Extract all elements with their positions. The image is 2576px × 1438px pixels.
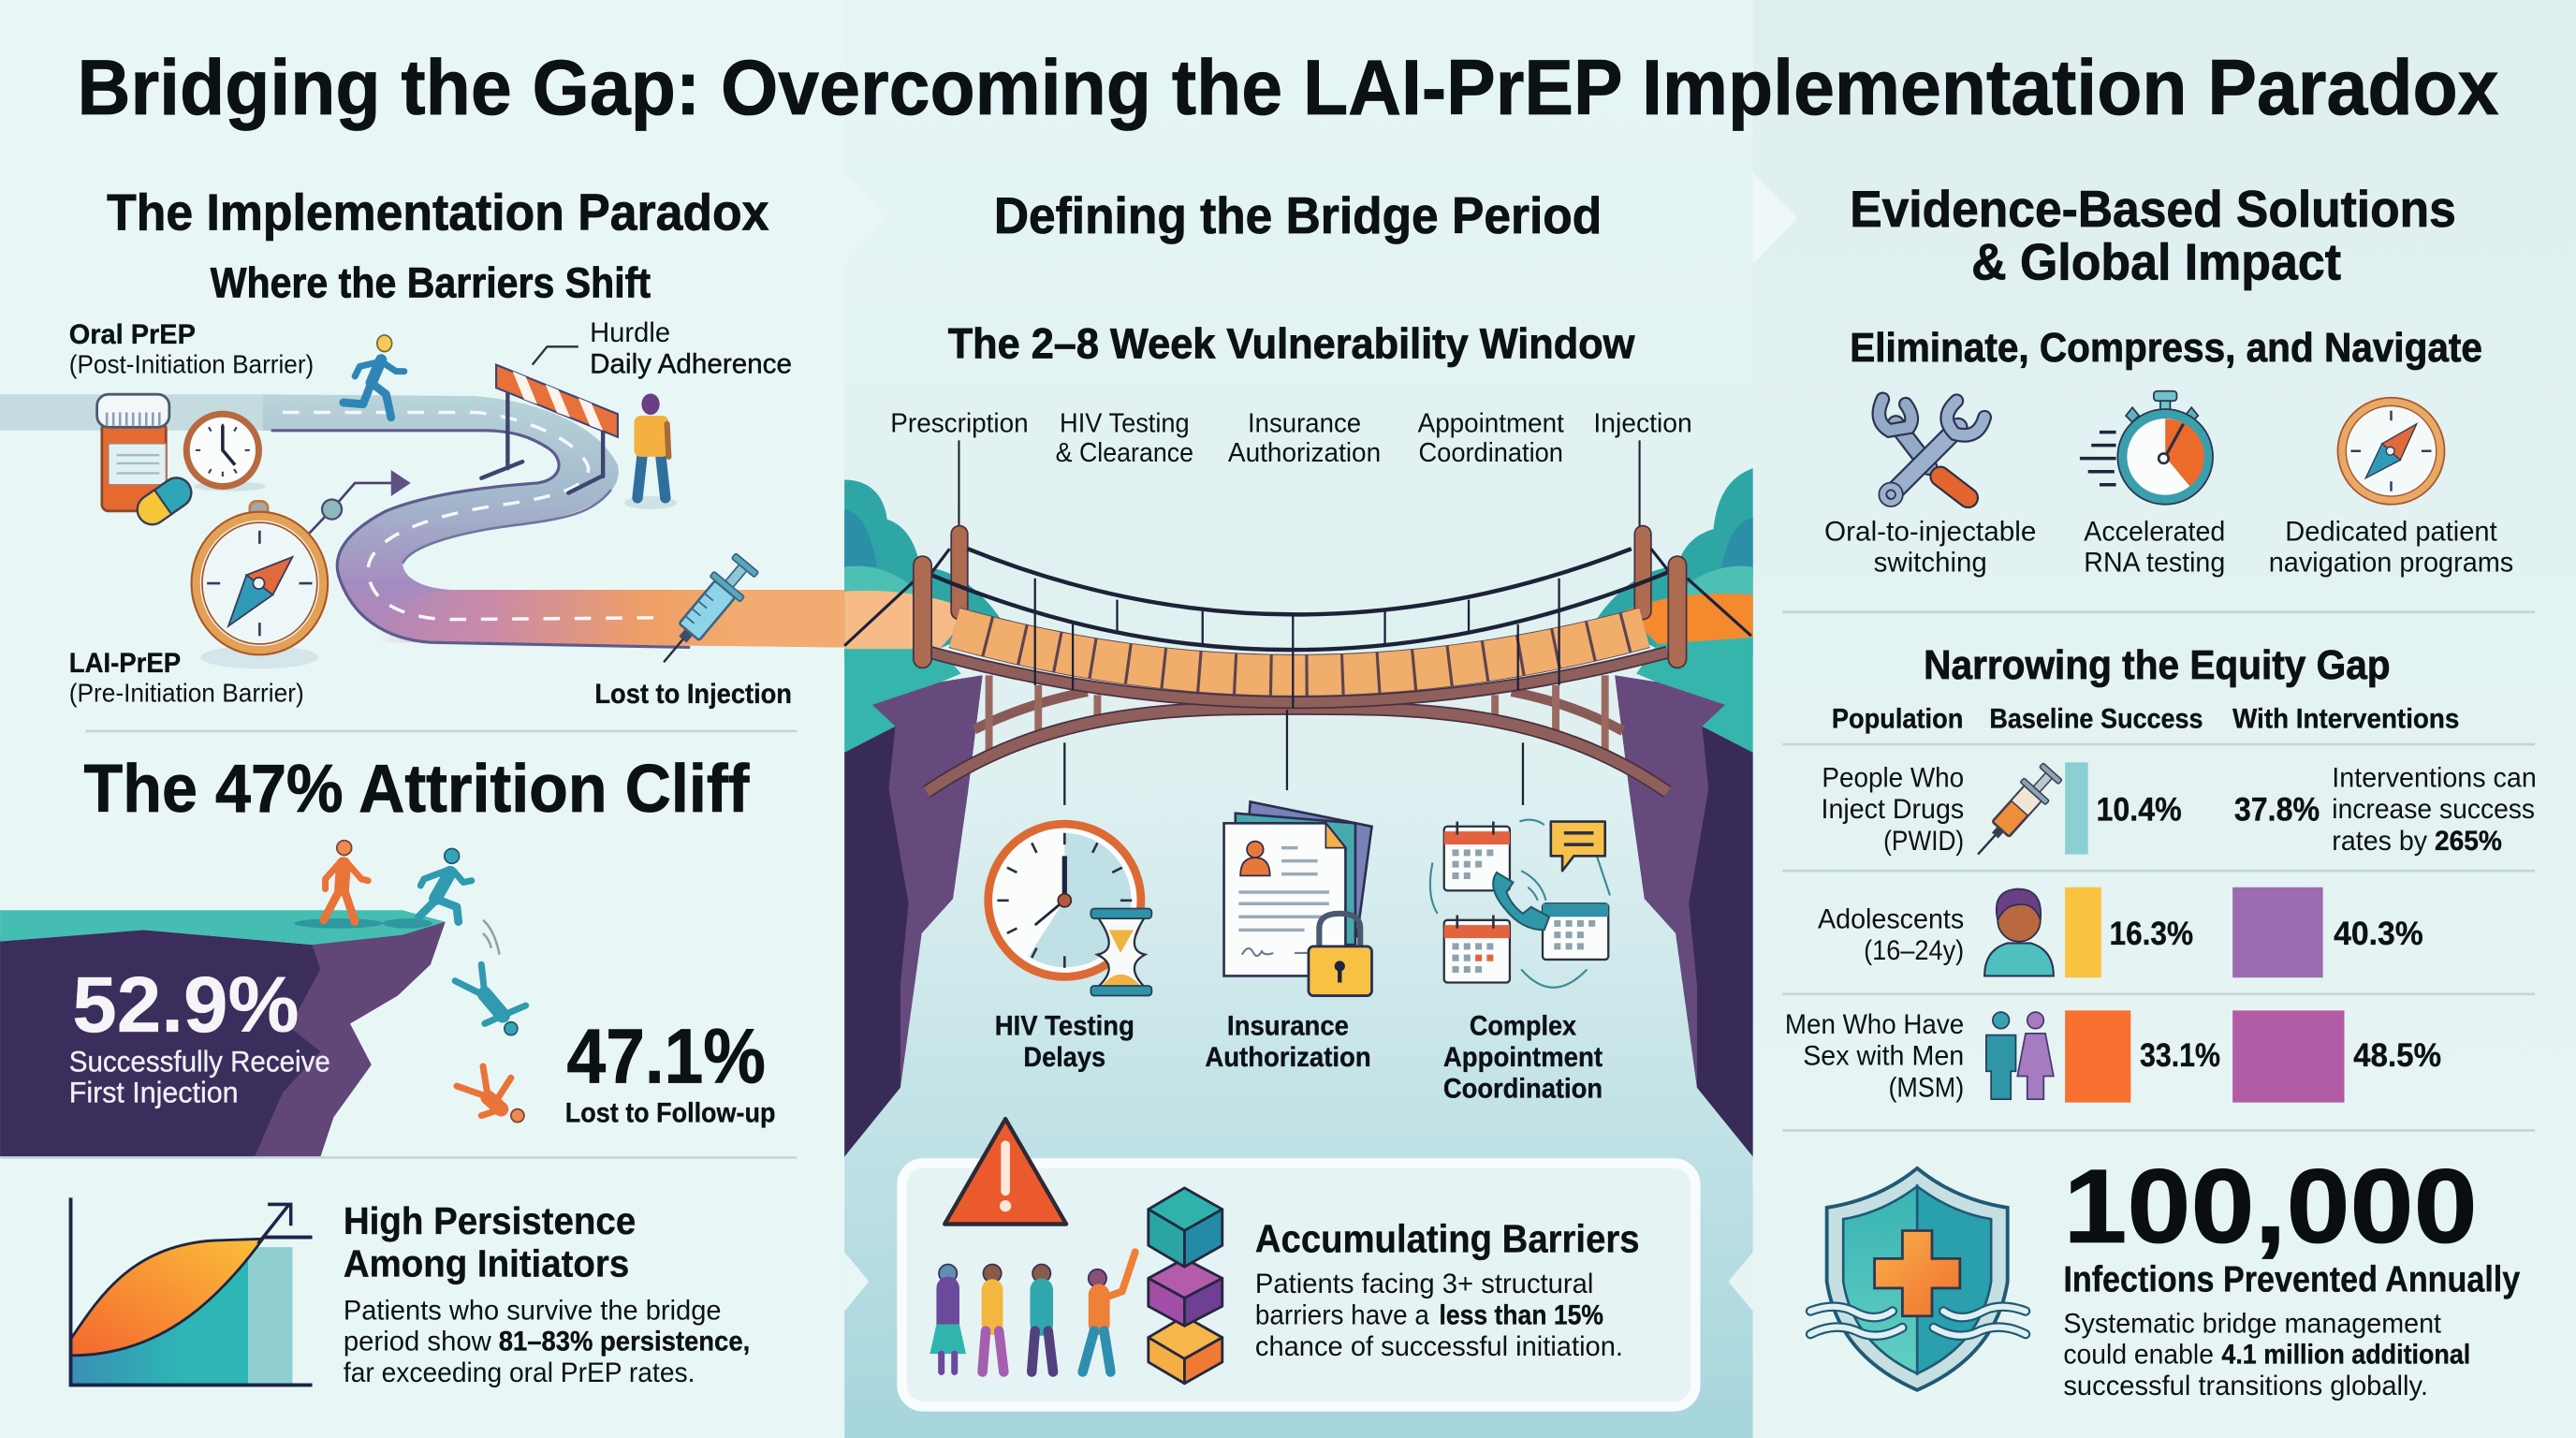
note: 265% increase [2332,763,2537,857]
figure: fallen orange person [457,1066,524,1123]
heading: narrowing the equity gap: Narrowing the Equity Gap [1924,642,2391,688]
panel: defining the bridge period [844,187,1753,1406]
subheading: vulnerability window: The 2–8 Week Vulnerability Window [948,320,1635,368]
row: adolescents: (16–24y) [1864,935,1964,966]
illustration: left cliff and trees [844,479,1003,1157]
timeline labels: Coordination [1419,438,1563,468]
table header: Baseline Success [1989,703,2203,734]
subheading: where the barriers shift: Where the Barriers Shift [211,259,651,307]
heading: high persistence: Among Initiators [344,1242,629,1285]
labels: solutions: Oral-to-injectable [1824,516,2036,547]
cables and hangers [844,549,1751,708]
panel: narrowing the equity gap [1782,642,2537,1103]
stat: 52.9%: Successfully Receive [69,1044,330,1078]
chevron: lower right notch [1728,1252,1753,1312]
labels: barrier icons: Authorization [1205,1042,1371,1073]
row: men who have sex with men: (MSM) [1888,1072,1964,1103]
icon: capsule [132,472,197,530]
timeline labels: Injection [1593,409,1692,439]
timeline labels [890,409,1692,468]
label: infections prevented annually: Infections Prevented Annually [2063,1259,2521,1299]
icon: appointment coordination [1430,820,1610,988]
heading: evidence-based solutions: & Global Impact [1971,233,2341,290]
table header: With Interventions [2232,703,2459,734]
row: people who inject drugs: (PWID) [1883,826,1964,857]
stat: 47.1%: Lost to Follow-up [565,1098,775,1129]
chart: persistence curve [71,1197,313,1385]
main arch [927,708,1667,792]
labels: barrier icons: Appointment [1443,1042,1603,1073]
icon: crossed wrench and screwdriver [1879,399,1984,503]
panel: the 47% attrition cliff [0,752,775,1157]
heading: defining the bridge period: Defining the Bridge Period [994,187,1602,244]
stat: 52.9%: 52.9% [72,961,299,1049]
illustration: suspension bridge [844,440,1751,805]
text: persistence description [344,1295,750,1388]
text: bridge management impact [2063,1308,2470,1401]
note: 265% increase: rates by [2332,826,2427,857]
text: bridge management impact: successful transitions globally. [2063,1371,2428,1401]
bar: baseline 33.1% [2065,1010,2130,1103]
panel: the implementation paradox [0,184,844,710]
note: 265% increase: Interventions can [2332,763,2537,794]
panel: global impact [1810,1147,2521,1401]
table header: Population [1832,703,1963,734]
bar: baseline 10.4% [2065,762,2088,855]
motion lines [483,920,500,955]
figure: falling blue person [455,964,526,1035]
icon: shield with medical cross [1810,1168,2026,1390]
row: people who inject drugs: 37.8% [2234,792,2320,829]
row: people who inject drugs: Inject Drugs [1822,794,1964,825]
icon: warning triangle [944,1119,1066,1224]
labels: barrier icons: Coordination [1443,1073,1603,1104]
text: persistence description: 81–83% persistence, [499,1327,750,1357]
timeline labels: Authorization [1228,438,1381,468]
text: persistence description: far exceeding oral PrEP rates. [344,1357,695,1388]
label: LAI-PrEP: (Pre-Initiation Barrier) [69,678,304,707]
icon: hurdle barrier [481,346,618,493]
icon: stopwatch [2080,391,2213,505]
icon: standing person [624,393,677,509]
subheading: eliminate, compress, navigate: Eliminate, Compress, and Navigate [1850,325,2482,371]
icon: compass with route arrow [192,470,411,668]
row: men who have sex with men: Sex with Men [1803,1040,1964,1071]
figure: running person [419,848,472,922]
callout: accumulating barriers [902,1119,1695,1406]
labels: solutions [1824,516,2513,579]
labels: solutions: switching [1874,548,1987,579]
bar: baseline 16.3% [2065,888,2101,977]
stat: 47.1%: 47.1% [567,1014,766,1100]
divider [85,730,797,732]
illustration: cliff [0,910,446,1157]
text: bridge management impact: 4.1 million additional [2221,1340,2470,1371]
deck [929,627,1667,702]
icon: clock with hourglass [988,824,1151,996]
note: 265% increase: increase success [2332,794,2535,825]
chevron: left to center [844,172,887,265]
panel: evidence-based solutions [1824,181,2513,579]
bridge vertical supports [989,675,1605,756]
text: bridge management impact: Systematic bridge management [2063,1308,2442,1339]
label: oral PrEP: (Post-Initiation Barrier) [69,349,314,378]
labels: barrier icons: Insurance [1227,1011,1349,1042]
label: hurdle, daily adherence [590,317,792,379]
label: hurdle, daily adherence: Hurdle [590,317,670,348]
bridge back arches [974,692,1623,731]
labels: barrier icons: HIV Testing [995,1011,1134,1042]
illustration: right cliff and trees [1595,468,1753,1157]
divider [1782,611,2535,613]
row: men who have sex with men: Men Who Have [1785,1009,1964,1040]
timeline labels: Appointment [1418,409,1564,439]
row: men who have sex with men [1785,1009,2441,1103]
labels: barrier icons: Delays [1023,1042,1105,1073]
icon: clock [186,414,266,492]
text: accumulating barriers: barriers have a [1255,1300,1429,1331]
row: adolescents: 40.3% [2334,916,2423,952]
row: adolescents [1818,888,2423,977]
text: persistence description: Patients who survive the bridge [344,1295,722,1326]
back posts [959,534,1643,611]
label: LAI-PrEP [69,648,304,707]
row: people who inject drugs: 10.4% [2096,792,2182,829]
icon: pill bottle [97,394,169,511]
icon: group of people [929,1252,1135,1372]
divider [0,1156,797,1158]
label: lost to injection: Lost to Injection [594,679,792,710]
stat: 100,000: 100,000 [2063,1147,2478,1265]
title: Bridging the Gap: Overcoming the LAI-PrEP Implementation Paradox [78,44,2498,131]
heading: evidence-based solutions [1850,181,2456,290]
label: oral PrEP [69,319,314,378]
label: oral PrEP: Oral PrEP [69,319,196,350]
heading: the implementation paradox: The Implementation Paradox [107,184,768,242]
labels: barrier icons [995,1011,1603,1104]
icon: adolescent [1984,888,2054,976]
panel: high persistence [71,1197,750,1388]
heading: high persistence [344,1199,636,1285]
row: men who have sex with men: 33.1% [2140,1037,2220,1074]
timeline labels: HIV Testing [1060,409,1190,439]
winding road illustration [0,394,844,647]
heading: evidence-based solutions: Evidence-Based Solutions [1850,181,2456,238]
text: accumulating barriers: Accumulating Barriers [1255,1216,1640,1260]
chevron: lower left notch [844,1252,869,1312]
labels: barrier icons: Complex [1470,1011,1576,1042]
chevron: center to right [1753,172,1797,265]
stat: 52.9% [69,961,330,1109]
icon: insurance documents with lock [1224,801,1372,996]
row: men who have sex with men: 48.5% [2353,1037,2441,1074]
icon: syringe [1966,760,2065,866]
timeline labels: & Clearance [1056,438,1193,468]
icon: syringe [649,550,762,675]
text: bridge management impact: could enable [2063,1340,2214,1371]
leader lines from labels [959,440,1640,529]
timeline labels: Insurance [1248,409,1361,439]
icon: compass [2337,398,2445,505]
labels: solutions: RNA testing [2084,548,2225,579]
front posts [923,565,1677,659]
heading: the 47% attrition cliff: The 47% Attrition Cliff [84,752,750,827]
icon: blue runner [344,335,404,418]
table header [1832,703,2459,734]
panel: center column background [844,0,1753,1438]
figure: walking person [324,841,368,922]
text: accumulating barriers: Patients facing 3+ structural [1255,1269,1593,1299]
label: hurdle, daily adherence: Daily Adherence [590,348,792,379]
stat: 52.9%: First Injection [69,1076,239,1109]
bar: with interventions 40.3% [2232,888,2323,977]
lines to barrier icons [1064,710,1523,805]
labels: solutions: Accelerated [2084,516,2225,547]
divider [1782,1129,2535,1131]
labels: solutions: Dedicated patient [2285,516,2497,547]
panel: right column background [1753,0,2576,1438]
text: accumulating barriers: chance of successful initiation. [1255,1331,1623,1362]
timeline labels: Prescription [890,409,1029,439]
text: accumulating barriers [1255,1216,1640,1362]
row: adolescents: 16.3% [2110,916,2193,952]
note: 265% increase: 265% [2435,826,2502,857]
text: persistence description: period show [344,1327,491,1357]
heading: high persistence: High Persistence [344,1199,636,1242]
labels: solutions: navigation programs [2269,548,2513,579]
text: accumulating barriers: less than 15% [1439,1300,1603,1331]
bar: with interventions 48.5% [2232,1010,2344,1103]
label: LAI-PrEP: LAI-PrEP [69,648,181,679]
icon: stacked cubes [1149,1188,1222,1384]
row: people who inject drugs: People Who [1822,763,1964,794]
panel: left column background [0,0,844,1438]
icon: two people [1986,1012,2054,1099]
row: adolescents: Adolescents [1818,904,1964,935]
row: people who inject drugs [1822,760,2537,866]
